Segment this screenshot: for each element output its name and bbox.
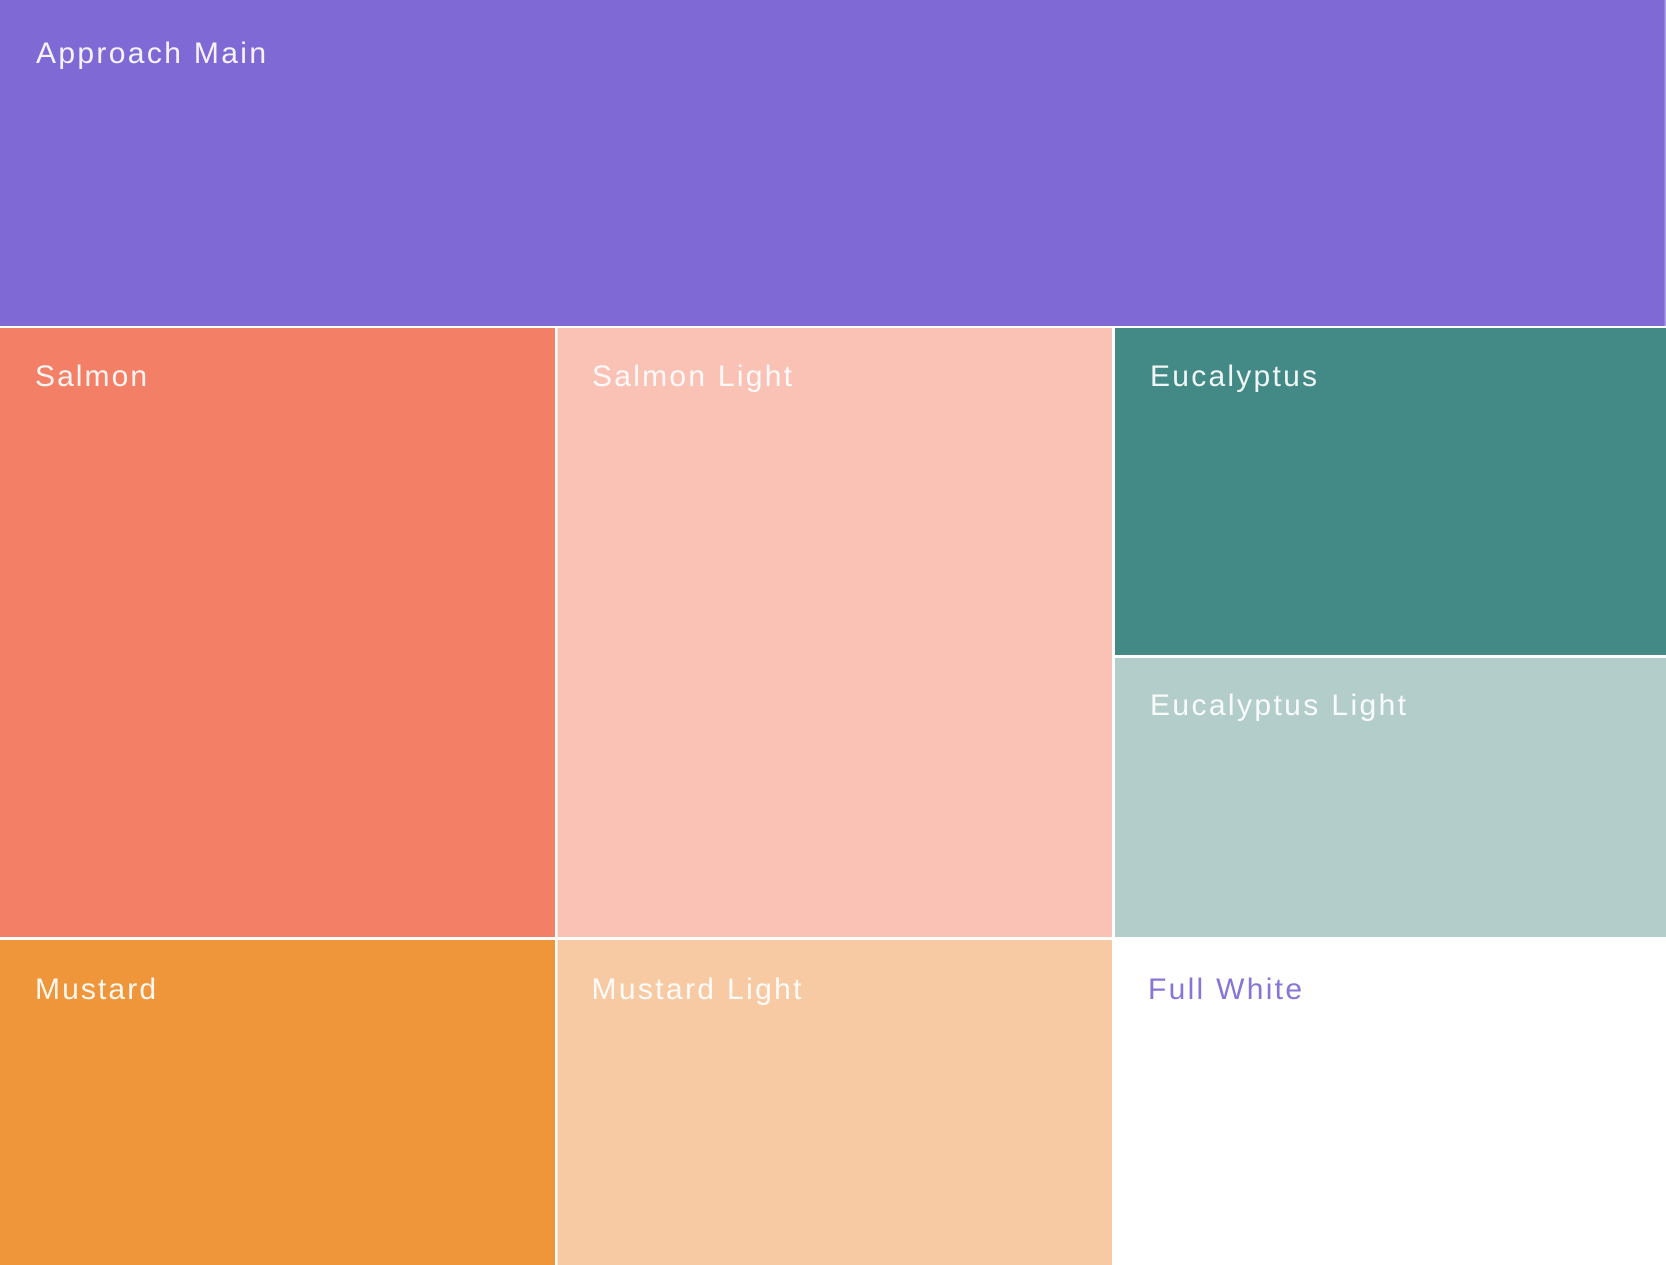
- label: Mustard Light: Mustard Light: [592, 973, 802, 1006]
- label: Salmon: Salmon: [35, 360, 147, 393]
- panel: Full White: [1115, 940, 1666, 1265]
- label: Salmon Light: Salmon Light: [592, 360, 793, 393]
- label: Eucalyptus: Eucalyptus: [1150, 360, 1317, 393]
- panel: Mustard: [0, 940, 555, 1265]
- label: Eucalyptus Light: Eucalyptus Light: [1150, 689, 1407, 722]
- label: Full White: Full White: [1148, 973, 1302, 1006]
- panel: Eucalyptus: [1115, 328, 1666, 655]
- panel: Approach Main: [0, 0, 1666, 326]
- label: Mustard: Mustard: [35, 973, 156, 1006]
- label: Approach Main: Approach Main: [36, 37, 266, 70]
- panel: Salmon Light: [558, 328, 1112, 937]
- panel: Eucalyptus Light: [1115, 658, 1666, 937]
- panel: Mustard Light: [558, 940, 1112, 1265]
- panel: Salmon: [0, 328, 555, 937]
